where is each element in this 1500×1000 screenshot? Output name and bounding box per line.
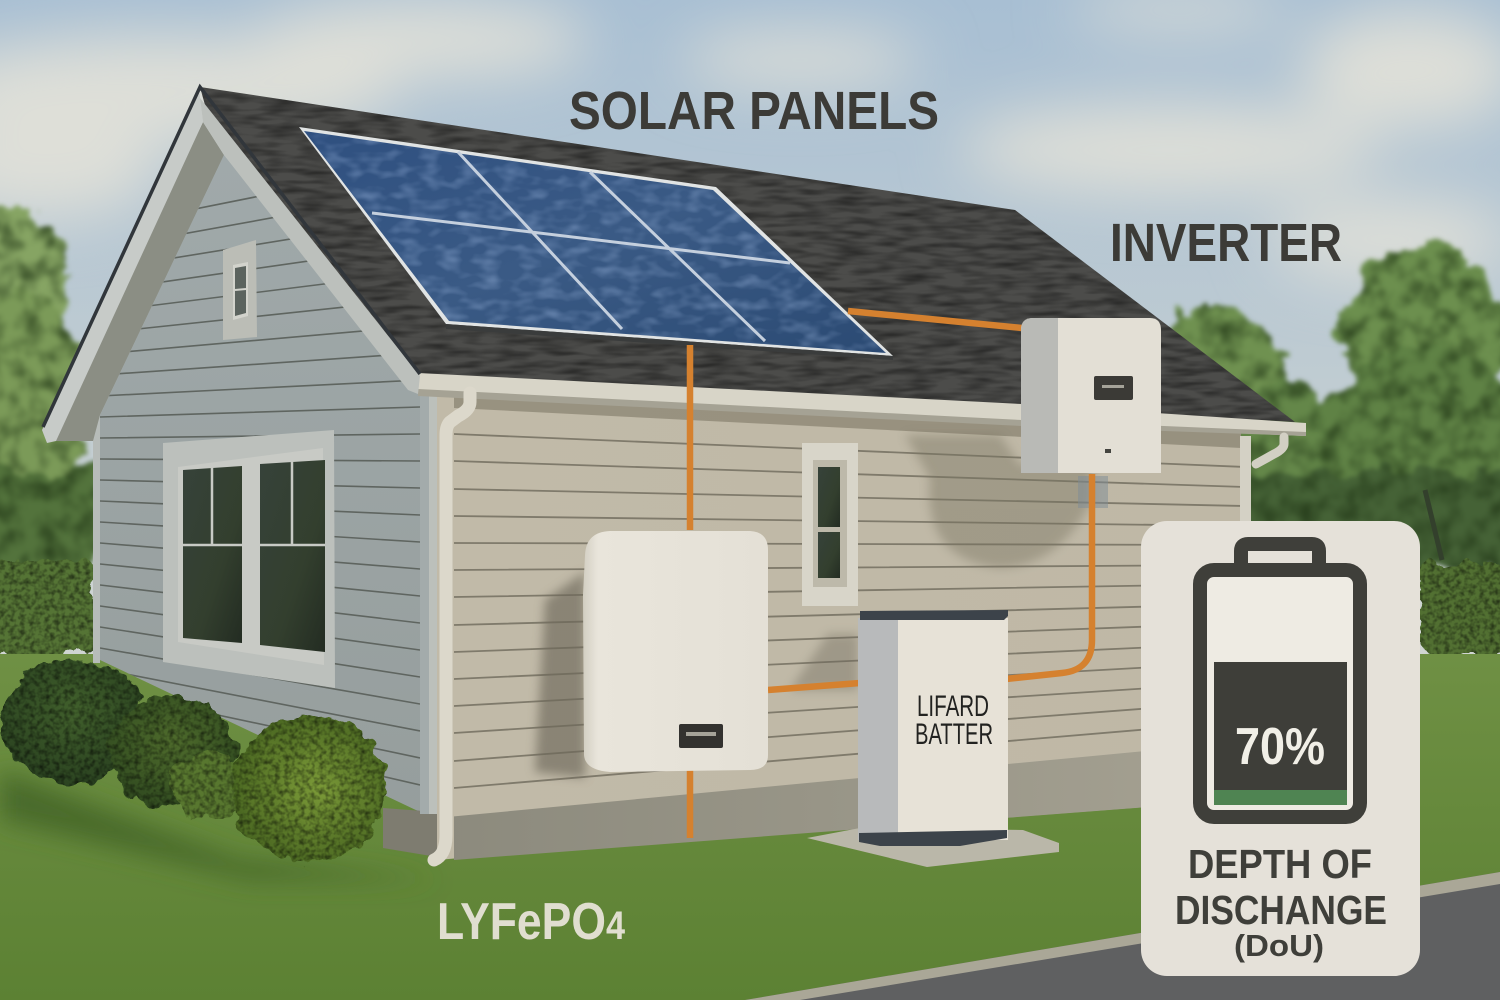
LiFePO4 battery unit — [858, 610, 1008, 846]
house gable wall — [93, 155, 438, 857]
roof eave fascia — [418, 373, 1306, 436]
roof — [200, 87, 1295, 422]
card caption: DEPTH OF — [1188, 841, 1372, 887]
concrete pad — [807, 828, 1059, 867]
battery label — [915, 690, 993, 751]
battery icon — [1200, 544, 1360, 817]
small wall window — [802, 443, 858, 606]
trees left — [0, 210, 100, 570]
gutter downspouts — [434, 393, 1284, 860]
battery label: LIFARD — [917, 690, 989, 723]
wall shadows — [535, 572, 585, 778]
sky with clouds — [0, 0, 1500, 680]
card caption: DISCHANGE — [1175, 887, 1387, 933]
depth of discharge card — [1141, 521, 1420, 976]
heading: inverter: INVERTER — [1110, 213, 1342, 273]
heading: solar panels: SOLAR PANELS — [569, 81, 939, 141]
cabinet display — [679, 724, 723, 748]
card caption: (DoU) — [1234, 928, 1324, 963]
bushes — [1, 660, 386, 861]
main battery cabinet — [583, 531, 768, 772]
battery percentage: 70% — [1235, 718, 1325, 776]
inverter display — [1094, 376, 1133, 400]
card caption — [1175, 841, 1387, 963]
hedges — [0, 560, 1500, 655]
wall corner trims — [93, 415, 100, 663]
house front wall — [437, 388, 1251, 862]
right wall corner trim — [1240, 436, 1251, 526]
large window — [163, 430, 335, 688]
orange cables — [690, 311, 1108, 838]
battery label: BATTER — [915, 718, 993, 751]
lawn — [0, 654, 1500, 1000]
label: LiFePO4: LYFePO4 — [437, 893, 626, 951]
trees right — [1145, 245, 1500, 570]
inverter — [1021, 318, 1161, 473]
gable soffit and trim — [42, 87, 420, 443]
solar panels — [299, 127, 893, 360]
small attic window — [223, 240, 257, 340]
